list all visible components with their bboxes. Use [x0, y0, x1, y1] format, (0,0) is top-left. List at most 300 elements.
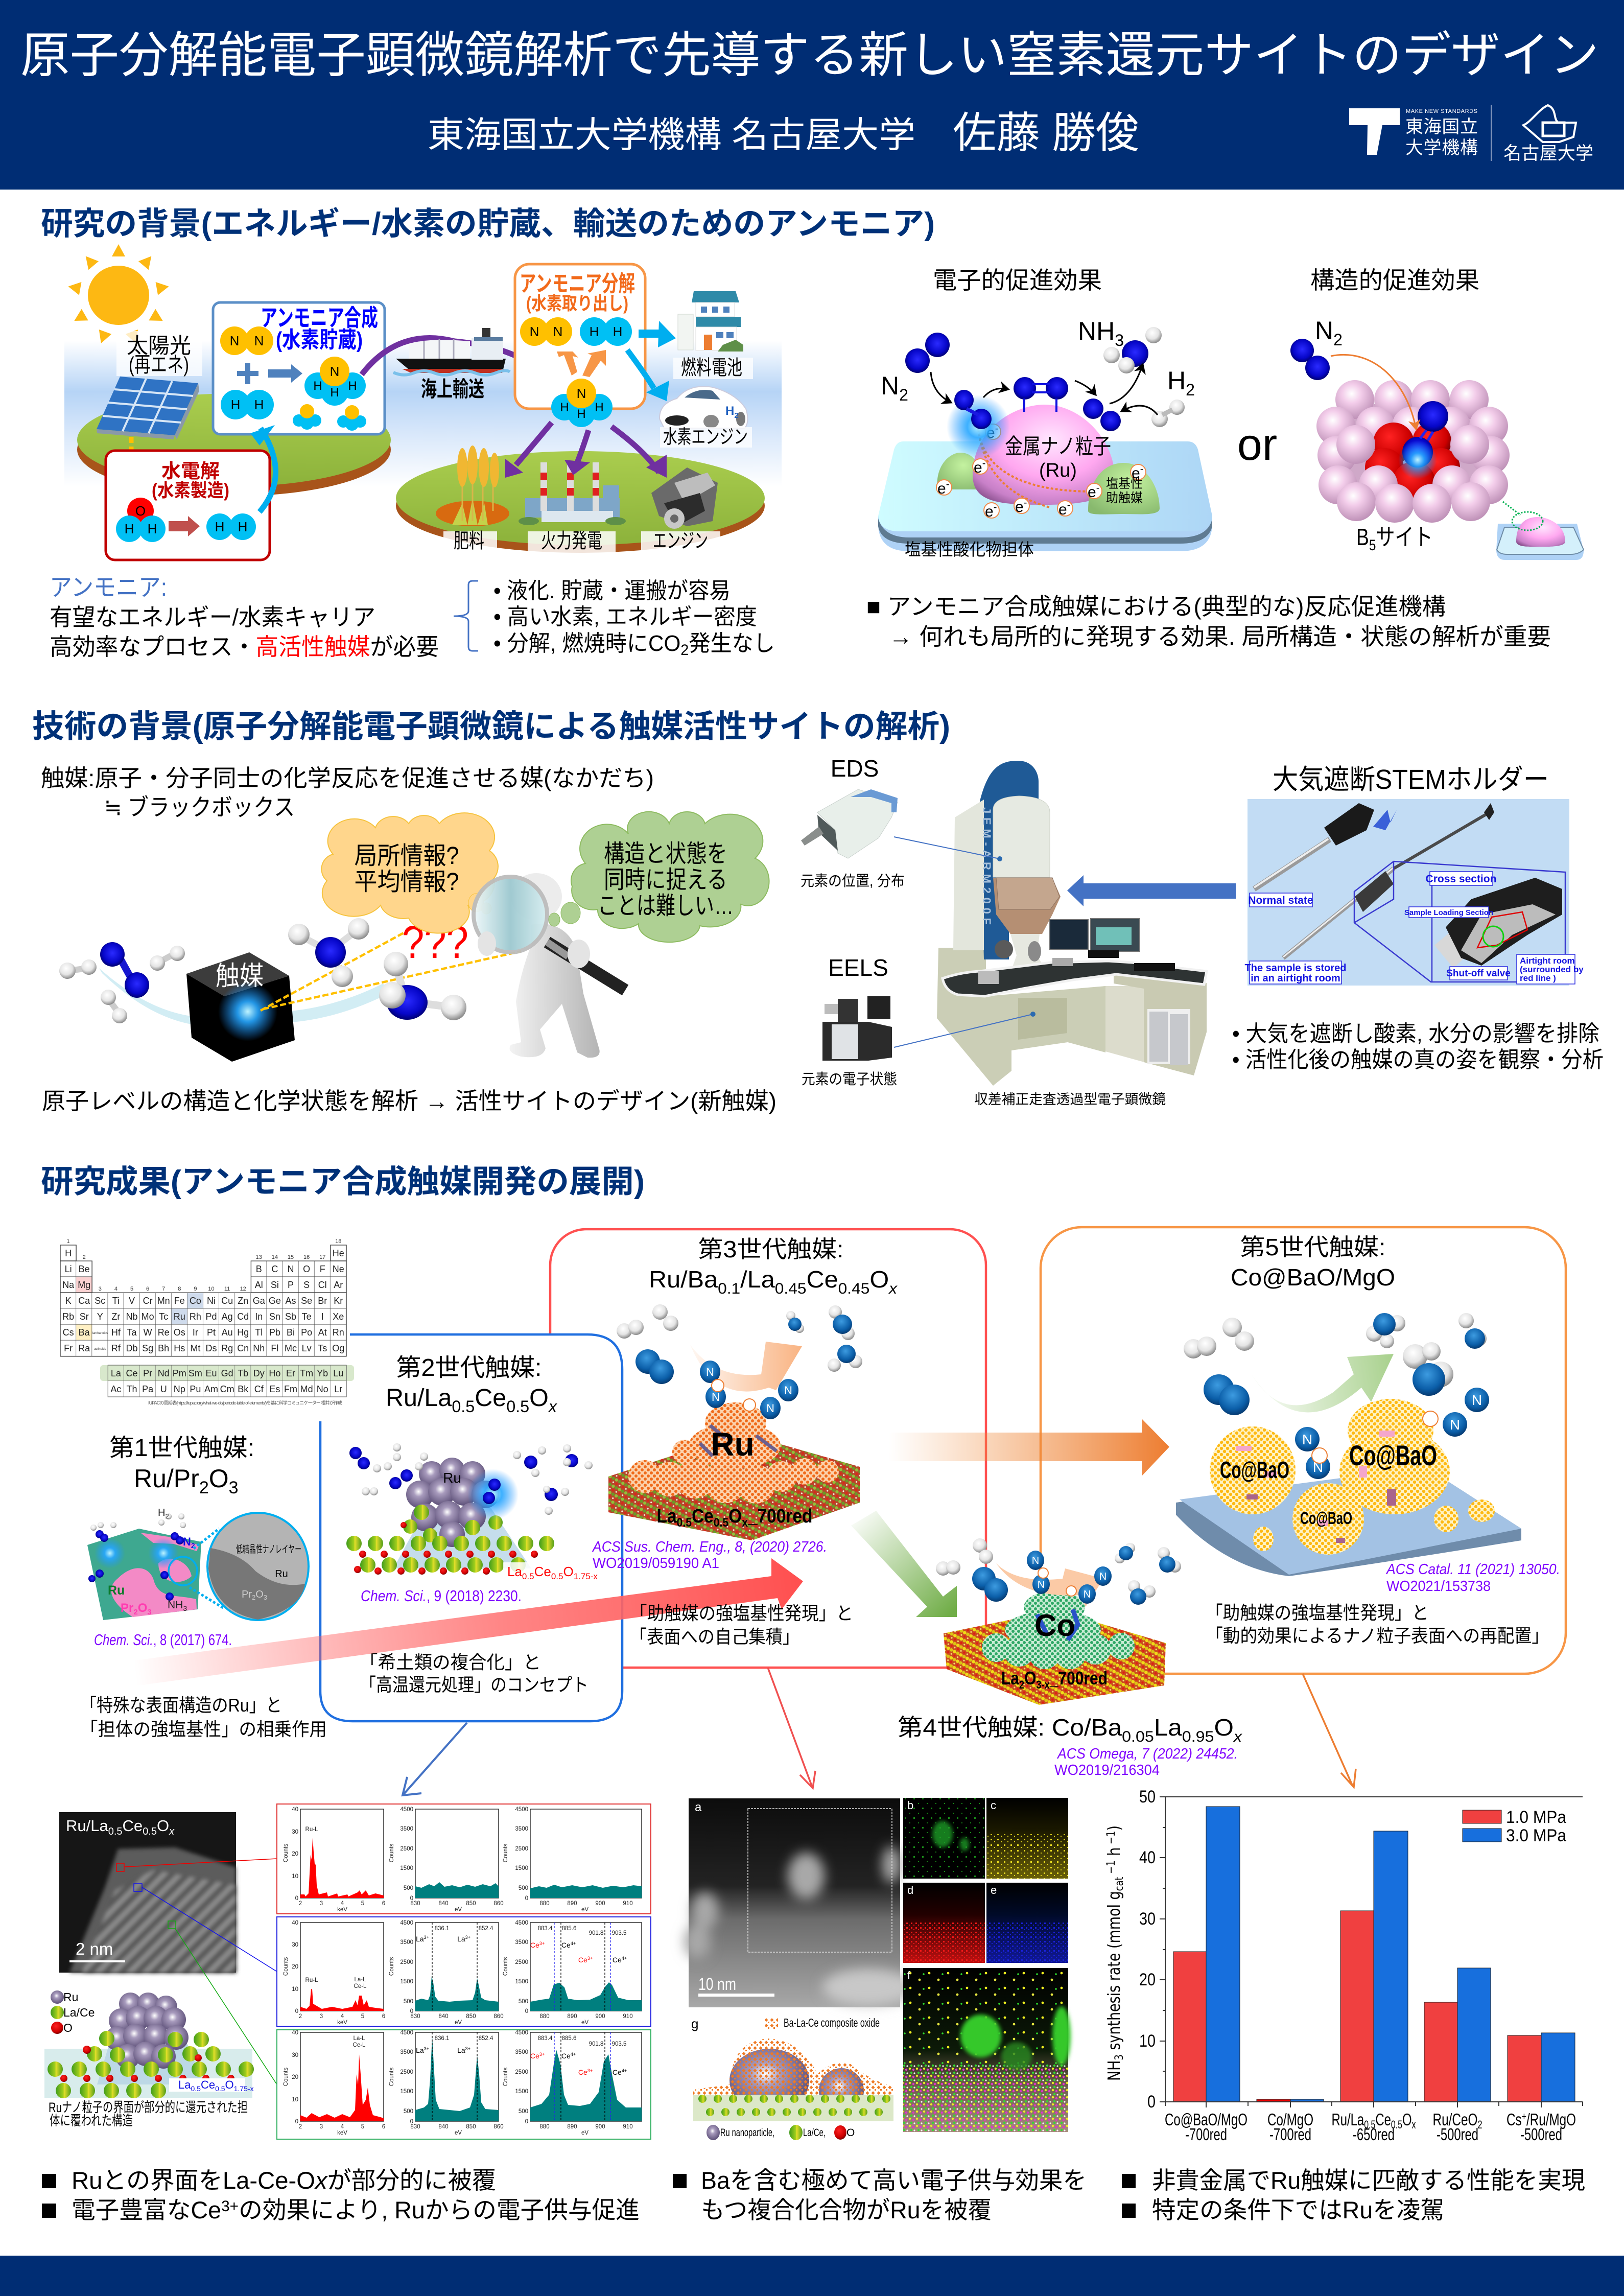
formula: third generation: O — [869, 1266, 889, 1293]
label: g and composite oxide legend: Ba-La-Ce composite oxide — [784, 2016, 880, 2029]
catalyst illustration: third generation: 0.5 — [677, 1516, 692, 1530]
icon: sun — [67, 244, 170, 345]
panel: EDS EELS spectra, support region: 880 — [539, 2124, 550, 2130]
logo: Nagoya University — [1503, 105, 1593, 163]
panel: air-protected holder: Normal state — [1248, 895, 1313, 906]
panel: EDS EELS spectra, interface region: eV — [455, 2020, 462, 2026]
catalyst illustration: third generation: N — [784, 1384, 792, 1397]
panel: air-protected holder: Airtight room — [1520, 956, 1575, 966]
periodic table: 12 — [240, 1286, 246, 1292]
beam — [99, 968, 388, 1026]
monitors — [1050, 920, 1088, 949]
elemental map: f overlay — [903, 1968, 1071, 2132]
periodic table: 11 — [224, 1286, 230, 1292]
model: interface structure: O — [225, 2078, 234, 2091]
panel: EDS EELS spectra, support region: 860 — [493, 2124, 504, 2130]
axis labels: Co/MgO — [1267, 2110, 1313, 2129]
text: third generation concept — [630, 1603, 853, 1647]
cluster: B5 atoms — [1316, 380, 1510, 508]
periodic table: Ru — [174, 1311, 185, 1322]
panel: EDS EELS spectra, Ru region: keV — [337, 1907, 347, 1913]
periodic table: 14 — [272, 1254, 278, 1260]
panel: EDS EELS spectra, interface region: Counts — [503, 1957, 509, 1976]
model: composite oxide covering — [693, 2039, 893, 2121]
title: 原子分解能電子顕微鏡解析で先導する新しい窒素還元サイトのデザイン — [20, 28, 1599, 83]
electrons: - — [982, 458, 985, 469]
periodic table: Ni — [207, 1296, 216, 1306]
image: STEM micrograph: Ce — [123, 1817, 143, 1835]
title and formula: fourth generation: 第4世代触媒: Co/Ba — [898, 1714, 1107, 1741]
periodic table: Dy — [253, 1368, 265, 1378]
inset: particle on support — [1496, 502, 1584, 560]
periodic table: Zr — [111, 1311, 120, 1322]
periodic table: Ce — [126, 1368, 138, 1378]
axis title: −1 — [1105, 1860, 1118, 1877]
periodic table: Y — [97, 1311, 103, 1322]
cloud: difficulty: 構造と状態を — [604, 840, 727, 868]
panel: EDS EELS spectra, Ru region: Ru-L — [305, 1826, 318, 1833]
catalyst illustration: third generation: _700red — [747, 1506, 812, 1527]
periodic table: 4 — [114, 1286, 117, 1292]
text block: findings left: 3+ — [221, 2198, 239, 2215]
panel: EDS EELS spectra, interface region: 0 — [525, 2008, 528, 2014]
panel: EDS EELS spectra, support region: 0 — [295, 2119, 298, 2125]
periodic table: Pb — [269, 1327, 280, 1338]
panel: EDS EELS spectra, support region: Ce-L — [353, 2042, 366, 2048]
periodic table: Cf — [254, 1384, 264, 1394]
text: fifth generation concept — [1206, 1602, 1549, 1646]
panel: EDS EELS spectra, Ru region: 3500 — [515, 1826, 528, 1832]
heading: electronic promotion: 電子的促進効果 — [933, 267, 1102, 294]
electrons: - — [995, 423, 998, 434]
axis labels: -500red — [1437, 2125, 1478, 2144]
panel: EDS EELS spectra, support region: 850 — [466, 2124, 476, 2130]
periodic table: Es — [269, 1384, 280, 1394]
panel: EDS EELS spectra, interface region: 4 — [341, 2013, 344, 2020]
axis numbers: 50 — [1139, 1787, 1156, 1807]
glow — [218, 982, 277, 1041]
panel: EDS EELS spectra, support region: 836.1 — [435, 2035, 449, 2042]
text block: ammonia — [50, 574, 439, 660]
text block: ammonia merits: • 高い水素, エネルギー密度 — [493, 604, 757, 629]
panel: EDS EELS spectra, support region: Ce — [561, 2052, 571, 2060]
cloud: difficulty: ことは難しい… — [598, 893, 734, 920]
arrow: to fuel cell — [639, 321, 676, 347]
periodic table: Sn — [269, 1311, 280, 1322]
axis numbers: 40 — [1139, 1848, 1156, 1867]
text block: ammonia merits: • 分解, 燃焼時にCO — [493, 631, 689, 656]
panel: EDS EELS spectra, support region: 1500 — [515, 2089, 528, 2095]
label: B5 site: 5 — [1369, 537, 1376, 554]
formula: third generation: /La — [740, 1266, 775, 1293]
labels: uses: エンジン — [653, 530, 708, 552]
panel: air-protected holder: Cross section — [1426, 873, 1496, 885]
panel: EDS EELS spectra, interface region: Ce — [530, 1941, 539, 1949]
labels: formulas: NH — [1078, 317, 1115, 345]
axis title: NH — [1104, 2056, 1124, 2081]
labels: formulas: 2 — [1186, 381, 1195, 399]
citation: fifth generation: ACS Catal. 11 (2021) 13050. — [1385, 1561, 1560, 1578]
panel: EDS EELS spectra, Ru region: 840 — [438, 1901, 449, 1907]
text block: findings middle: Baを含む極めて高い電子供与効果を — [701, 2167, 1087, 2194]
label: microscope: 収差補正走査透過型電子顕微鏡 — [974, 1092, 1166, 1107]
panel: EDS EELS spectra, Ru region: 10 — [292, 1873, 298, 1880]
citation: third generation — [592, 1539, 827, 1572]
text: first generation concept — [80, 1695, 327, 1740]
periodic table: Bk — [238, 1384, 249, 1394]
axis labels — [1165, 2110, 1576, 2144]
catalyst illustration: fifth generation: Co@BaO — [1300, 1509, 1352, 1528]
panel: EDS EELS spectra, interface region: 910 — [623, 2013, 633, 2020]
panel: ammonia decomposition: (水素取り出し) — [526, 293, 628, 314]
periodic table: B — [256, 1264, 262, 1274]
panel: EDS EELS spectra, support region: Ce — [578, 2068, 587, 2076]
arrow: reaction — [690, 1342, 802, 1392]
panel: EDS EELS spectra, Ru region: 0 — [525, 1895, 528, 1902]
panel: EDS EELS spectra, interface region: 30 — [292, 1942, 298, 1948]
image: STEM micrograph: 0.5 — [143, 1826, 157, 1837]
periodic table: 8 — [178, 1286, 181, 1292]
icon: ship — [393, 328, 510, 375]
axis numbers: 0 — [1147, 2092, 1156, 2112]
catalyst illustration: third generation — [608, 1304, 862, 1540]
periodic table: Rg — [221, 1343, 233, 1353]
periodic table: Tb — [238, 1368, 248, 1378]
axis title: synthesis rate (mmol g — [1104, 1891, 1124, 2054]
text: or: or — [1237, 419, 1277, 470]
title and formula: fourth generation: La — [1154, 1714, 1182, 1741]
panel: EDS EELS spectra, Ru region: 4500 — [400, 1807, 413, 1813]
panel: EDS EELS spectra, interface region: eV — [581, 2020, 589, 2026]
periodic table: V — [129, 1296, 135, 1306]
catalyst illustration: fourth generation: _700red — [1049, 1668, 1108, 1689]
formula: second generation: 0.5 — [506, 1397, 529, 1416]
panel: EDS EELS spectra, Ru region: 1500 — [400, 1865, 413, 1871]
periodic table: Os — [174, 1327, 185, 1338]
periodic table: Fl — [271, 1343, 278, 1353]
panel: EDS EELS spectra, Ru region: 910 — [623, 1901, 633, 1907]
panel: EDS EELS spectra, interface region: 3 — [320, 2013, 323, 2020]
periodic table: Sg — [142, 1343, 153, 1353]
panel: EDS EELS spectra, support region — [277, 2030, 651, 2139]
panel: EDS EELS spectra, Ru region: 4500 — [515, 1807, 528, 1813]
panel: EDS EELS spectra, interface region: Ce — [561, 1941, 571, 1949]
label: g and composite oxide legend: g — [691, 2016, 698, 2031]
catalyst illustration: first generation: N — [183, 1535, 191, 1548]
periodic table: Rb — [62, 1311, 74, 1322]
catalyst illustration: fifth generation: Co@BaO — [1220, 1457, 1289, 1483]
panel: second generation — [320, 1334, 622, 1721]
label: EELS: EELS — [828, 954, 888, 981]
catalyst illustration: first generation: 2 — [133, 1608, 138, 1616]
panel: EDS EELS spectra, support region: 890 — [567, 2124, 577, 2130]
panel: EDS EELS spectra, support region: 2 — [299, 2124, 302, 2130]
panel: EDS EELS spectra, Ru region: Counts — [503, 1844, 509, 1862]
arrow: hydrogen to synthesis — [250, 425, 276, 512]
periodic table: N — [287, 1264, 294, 1274]
catalyst illustration: first generation: 2 — [191, 1541, 195, 1550]
footer band — [0, 2256, 1624, 2296]
panel: EDS EELS spectra, interface region: 830 — [410, 2013, 420, 2020]
model: interface structure: La — [178, 2078, 191, 2091]
catalyst illustration: third generation: Ce — [692, 1506, 714, 1527]
panel: third generation — [550, 1229, 986, 1668]
panel: EDS EELS spectra, Ru region: 2500 — [400, 1846, 413, 1852]
periodic table: Na — [62, 1280, 75, 1290]
periodic table: Co — [190, 1296, 201, 1306]
caption: interface structure — [49, 2100, 248, 2128]
periodic table: 6 — [146, 1286, 149, 1292]
periodic table: Br — [318, 1296, 327, 1306]
panel: EDS EELS spectra, interface region: 880 — [539, 2013, 550, 2020]
catalyst illustration: first generation: Ru — [275, 1568, 288, 1580]
image: STEM micrograph: Ru/La — [66, 1817, 108, 1835]
image: STEM micrograph: 0.5 — [108, 1826, 123, 1837]
cluster: front atoms — [1319, 425, 1508, 523]
logo: Tokai National Higher Education and Research System: 大学機構 — [1405, 138, 1478, 158]
logo: Tokai National Higher Education and Research System: 東海国立 — [1405, 117, 1478, 137]
catalyst illustration: fifth generation: N — [1450, 1417, 1460, 1433]
panel: EDS EELS spectra, Ru region: 900 — [595, 1901, 605, 1907]
labels: uses — [443, 530, 720, 554]
electrons: - — [1067, 500, 1070, 511]
panel: EDS EELS spectra, Ru region: 850 — [466, 1901, 476, 1907]
icon: EELS device — [822, 996, 892, 1061]
periodic table: Ne — [333, 1264, 344, 1274]
elemental map: e — [986, 1883, 1068, 1963]
panel: EDS EELS spectra, support region: 900 — [595, 2124, 605, 2130]
periodic table: Rf — [111, 1343, 121, 1353]
panel: EDS EELS spectra, Ru region: 3 — [320, 1901, 323, 1907]
panel: EDS EELS spectra, interface region: 10 — [292, 1986, 298, 1993]
panel: EDS EELS spectra, interface region: 850 — [466, 2013, 476, 2020]
panel: EDS EELS spectra, support region: 1500 — [400, 2089, 413, 2095]
periodic table: Hf — [111, 1327, 121, 1338]
panel: EDS EELS spectra, support region: 3+ — [465, 2046, 470, 2051]
catalyst illustration: first generation: 2 — [252, 1594, 255, 1601]
panel: EDS EELS spectra, interface region: 20 — [292, 1964, 298, 1970]
spectrum: La M lines — [415, 1976, 499, 2011]
panel: EDS EELS spectra, interface region: 3500 — [515, 1939, 528, 1946]
catalyst illustration: first generation: 3 — [147, 1608, 152, 1616]
catalyst illustration: fifth generation: N — [1313, 1459, 1323, 1475]
cross section — [1434, 878, 1562, 968]
catalyst illustration: second generation — [346, 1443, 598, 1581]
panel: EDS EELS spectra, Ru region: eV — [455, 1907, 462, 1913]
periodic table: IUPACの周期表(https://iupac.org/what-we-do/periodic-table-of-elements/)を基に科学コミュニケーター 櫻井が作成 — [148, 1400, 342, 1405]
panel: EDS EELS spectra, support region: 910 — [623, 2124, 633, 2130]
panel: EDS EELS spectra, Ru region: Counts — [283, 1844, 289, 1862]
panel: EDS EELS spectra, Ru region: 860 — [493, 1901, 504, 1907]
label: B5 site: サイト — [1376, 524, 1433, 550]
diagram: electronic promotion — [878, 317, 1212, 559]
heading: structural promotion: 構造的促進効果 — [1310, 267, 1479, 294]
periodic table: Th — [126, 1384, 137, 1394]
model: interface structure — [44, 1993, 254, 2098]
panel: EDS EELS spectra, support region: 3+ — [539, 2052, 545, 2057]
elemental map: c — [986, 1798, 1068, 1879]
periodic table: Rn — [333, 1327, 344, 1338]
citation: fourth generation: WO2019/216304 — [1054, 1762, 1160, 1778]
molecule: NH3 — [551, 379, 613, 427]
panel: EDS EELS spectra, Ru region: 500 — [519, 1885, 528, 1891]
text block: findings left: Ruとの界面をLa-Ce-Oxが部分的に被覆 — [72, 2167, 496, 2194]
arrow: holder to microscope — [1067, 875, 1236, 906]
title and formula: fourth generation: O — [1214, 1714, 1234, 1741]
panel: EDS EELS spectra, support region: 4+ — [571, 2052, 576, 2057]
panel: air-protected holder: in an airtight room — [1251, 973, 1340, 984]
panel: EDS EELS spectra, support region: 4+ — [622, 2068, 627, 2073]
text block: findings right: 特定の条件下ではRuを凌駕 — [1152, 2196, 1444, 2223]
image: HAADF micrograph — [684, 1798, 914, 2007]
catalyst illustration: fourth generation: N — [1084, 1589, 1091, 1600]
periodic table: Ir — [193, 1327, 198, 1338]
panel: air-protected holder: The sample is stored — [1245, 963, 1346, 974]
promoter left — [937, 453, 981, 489]
panel: EDS EELS spectra, interface region: 901.8 — [589, 1930, 603, 1936]
label: hydrogen engine: 水素エンジン — [663, 427, 748, 448]
arrows: reaction — [931, 364, 1158, 415]
labels: formulas: N — [881, 371, 899, 400]
microscope — [937, 761, 1207, 1086]
axis labels: 0.5 — [1391, 2118, 1402, 2131]
text block: catalyst definition — [41, 765, 654, 821]
text block: holder merits — [1232, 1021, 1604, 1072]
panel: EDS EELS spectra, support region: keV — [337, 2130, 347, 2136]
cloud: local or average: 局所情報? — [355, 842, 459, 870]
axis title: h — [1104, 1847, 1124, 1860]
support plate — [878, 441, 1212, 551]
model: interface structure: 0.5 — [215, 2084, 225, 2093]
microscope: JEM-ARM200F — [980, 807, 993, 925]
label: solar: (再エネ) — [129, 353, 189, 377]
text: second generation concept — [360, 1652, 589, 1695]
panel: EDS EELS spectra, interface region: 1500 — [515, 1979, 528, 1985]
model: interface structure: 0.5 — [191, 2084, 201, 2093]
panel: EDS EELS spectra, interface region: La — [416, 1935, 424, 1943]
panel: EDS EELS spectra, Ru region: 3500 — [400, 1826, 413, 1832]
labels: formulas — [881, 317, 1195, 404]
panel: EDS EELS spectra, Ru region: 880 — [539, 1901, 550, 1907]
atoms: red site — [1365, 422, 1460, 504]
formula: second generation: O — [529, 1385, 549, 1412]
panel: EDS EELS spectra, support region: 852.4 — [479, 2035, 493, 2042]
text block: catalyst definition: ≒ ブラックボックス — [104, 794, 295, 821]
panel: EDS EELS spectra, interface region: 860 — [493, 2013, 504, 2020]
periodic table: Cl — [318, 1280, 327, 1290]
axis numbers: 20 — [1139, 1970, 1156, 1989]
panel: ammonia decomposition: N — [530, 324, 539, 339]
label: N2: N — [1315, 316, 1333, 345]
labels: uses: 肥料 — [454, 530, 484, 552]
periodic table: Au — [222, 1327, 233, 1338]
citation: fifth generation — [1385, 1561, 1560, 1595]
electrons: e — [1132, 465, 1140, 482]
elemental map: d: d — [907, 1884, 913, 1896]
text: third generation concept: 「表面への自己集積」 — [630, 1626, 799, 1647]
periodic table: No — [317, 1384, 328, 1394]
catalyst illustration: second generation: 1.75-x — [574, 1572, 598, 1581]
base — [937, 948, 1105, 1086]
icon: solar panels — [97, 377, 199, 439]
labels: holder — [1250, 872, 1575, 984]
catalyst illustration: fourth generation: O — [1024, 1668, 1036, 1689]
periodic table: K — [65, 1296, 72, 1306]
panel: ammonia synthesis: H — [313, 379, 322, 393]
panel: EDS EELS spectra, Ru region: 0 — [295, 1895, 298, 1902]
text block: promotion mechanism: ■ アンモニア合成触媒における(典型的な)反応促進機構 — [866, 593, 1446, 620]
zoom outline — [1354, 861, 1565, 982]
molecule: NH3: H — [577, 407, 586, 421]
title and formula: fourth generation: 0.95 — [1182, 1728, 1214, 1745]
panel: EDS EELS spectra, support region: 0 — [410, 2119, 413, 2125]
icon: power plant — [519, 462, 626, 525]
panel: ammonia synthesis: H — [330, 386, 339, 400]
text: question marks: ??? — [402, 917, 468, 968]
periodic table: Te — [302, 1311, 312, 1322]
chart: NH3 synthesis rate — [1104, 1787, 1583, 2144]
catalyst illustration: fifth generation — [1176, 1313, 1521, 1576]
arrow: generation 3 to 4 — [851, 1511, 957, 1617]
catalyst illustration: first generation: H — [158, 1507, 165, 1518]
arrow: generation 5 to chart — [1303, 1674, 1356, 1787]
periodic table: 9 — [194, 1286, 197, 1292]
nanoparticle — [973, 405, 1115, 505]
periodic table: Zn — [238, 1296, 248, 1306]
panel: EDS EELS spectra, interface region: 3+ — [539, 1941, 545, 1946]
panel: EDS EELS spectra, interface region: 6 — [382, 2013, 385, 2020]
formula: second generation: Ru/La — [386, 1385, 451, 1412]
title and formula: fourth generation: 0.05 — [1122, 1728, 1154, 1745]
periodic table: W — [144, 1327, 152, 1338]
image: HAADF micrograph: a — [695, 1800, 702, 1814]
panel: EDS EELS spectra, interface region: Ce — [578, 1956, 587, 1964]
periodic table: Pu — [190, 1384, 201, 1394]
panel: ammonia synthesis: N — [230, 333, 239, 348]
text: atomic level analysis: 原子レベルの構造と化学状態を解析 → 活性サイトのデザイン(新触媒) — [42, 1088, 776, 1114]
periodic table: Pd — [205, 1311, 217, 1322]
citation: fourth generation: ACS Omega, 7 (2022) 24452. — [1056, 1746, 1238, 1762]
panel: EDS EELS spectra, support region: Counts — [503, 2068, 509, 2086]
periodic table: Hs — [174, 1343, 185, 1353]
catalyst illustration: first generation: Pr — [242, 1589, 252, 1600]
panel: EDS EELS spectra, interface region — [277, 1917, 651, 2026]
axis labels: /Ru/MgO — [1526, 2110, 1576, 2129]
periodic table: 17 — [319, 1254, 325, 1260]
panel: EDS EELS spectra, interface region: 903.5 — [612, 1930, 626, 1936]
catalyst illustration: fourth generation: N — [1099, 1571, 1107, 1582]
periodic table: Eu — [205, 1368, 217, 1378]
periodic table: Rh — [190, 1311, 201, 1322]
axis labels: Co@BaO/MgO — [1165, 2110, 1248, 2129]
panel: water electrolysis — [106, 451, 270, 560]
panel: EDS EELS spectra, interface region: 0 — [295, 2008, 298, 2014]
panel: EDS EELS spectra, support region: La — [416, 2046, 424, 2054]
periodic table: Ba — [79, 1327, 90, 1338]
promoter right — [1088, 463, 1160, 514]
icon: black cube — [186, 952, 295, 1062]
periodic table: Pr — [143, 1368, 152, 1378]
periodic table: Sr — [80, 1311, 89, 1322]
periodic table: 5 — [130, 1286, 133, 1292]
panel: EDS EELS spectra, support region: 20 — [292, 2074, 298, 2080]
periodic table: Ho — [269, 1368, 280, 1378]
periodic table: Mc — [285, 1343, 297, 1353]
text block: holder merits: • 活性化後の触媒の真の姿を観察・分析 — [1232, 1047, 1604, 1072]
title: fifth generation: 第5世代触媒: — [1240, 1234, 1385, 1260]
catalyst illustration: fourth generation: Co — [1034, 1608, 1075, 1643]
title: third generation: 第3世代触媒: — [698, 1236, 844, 1262]
